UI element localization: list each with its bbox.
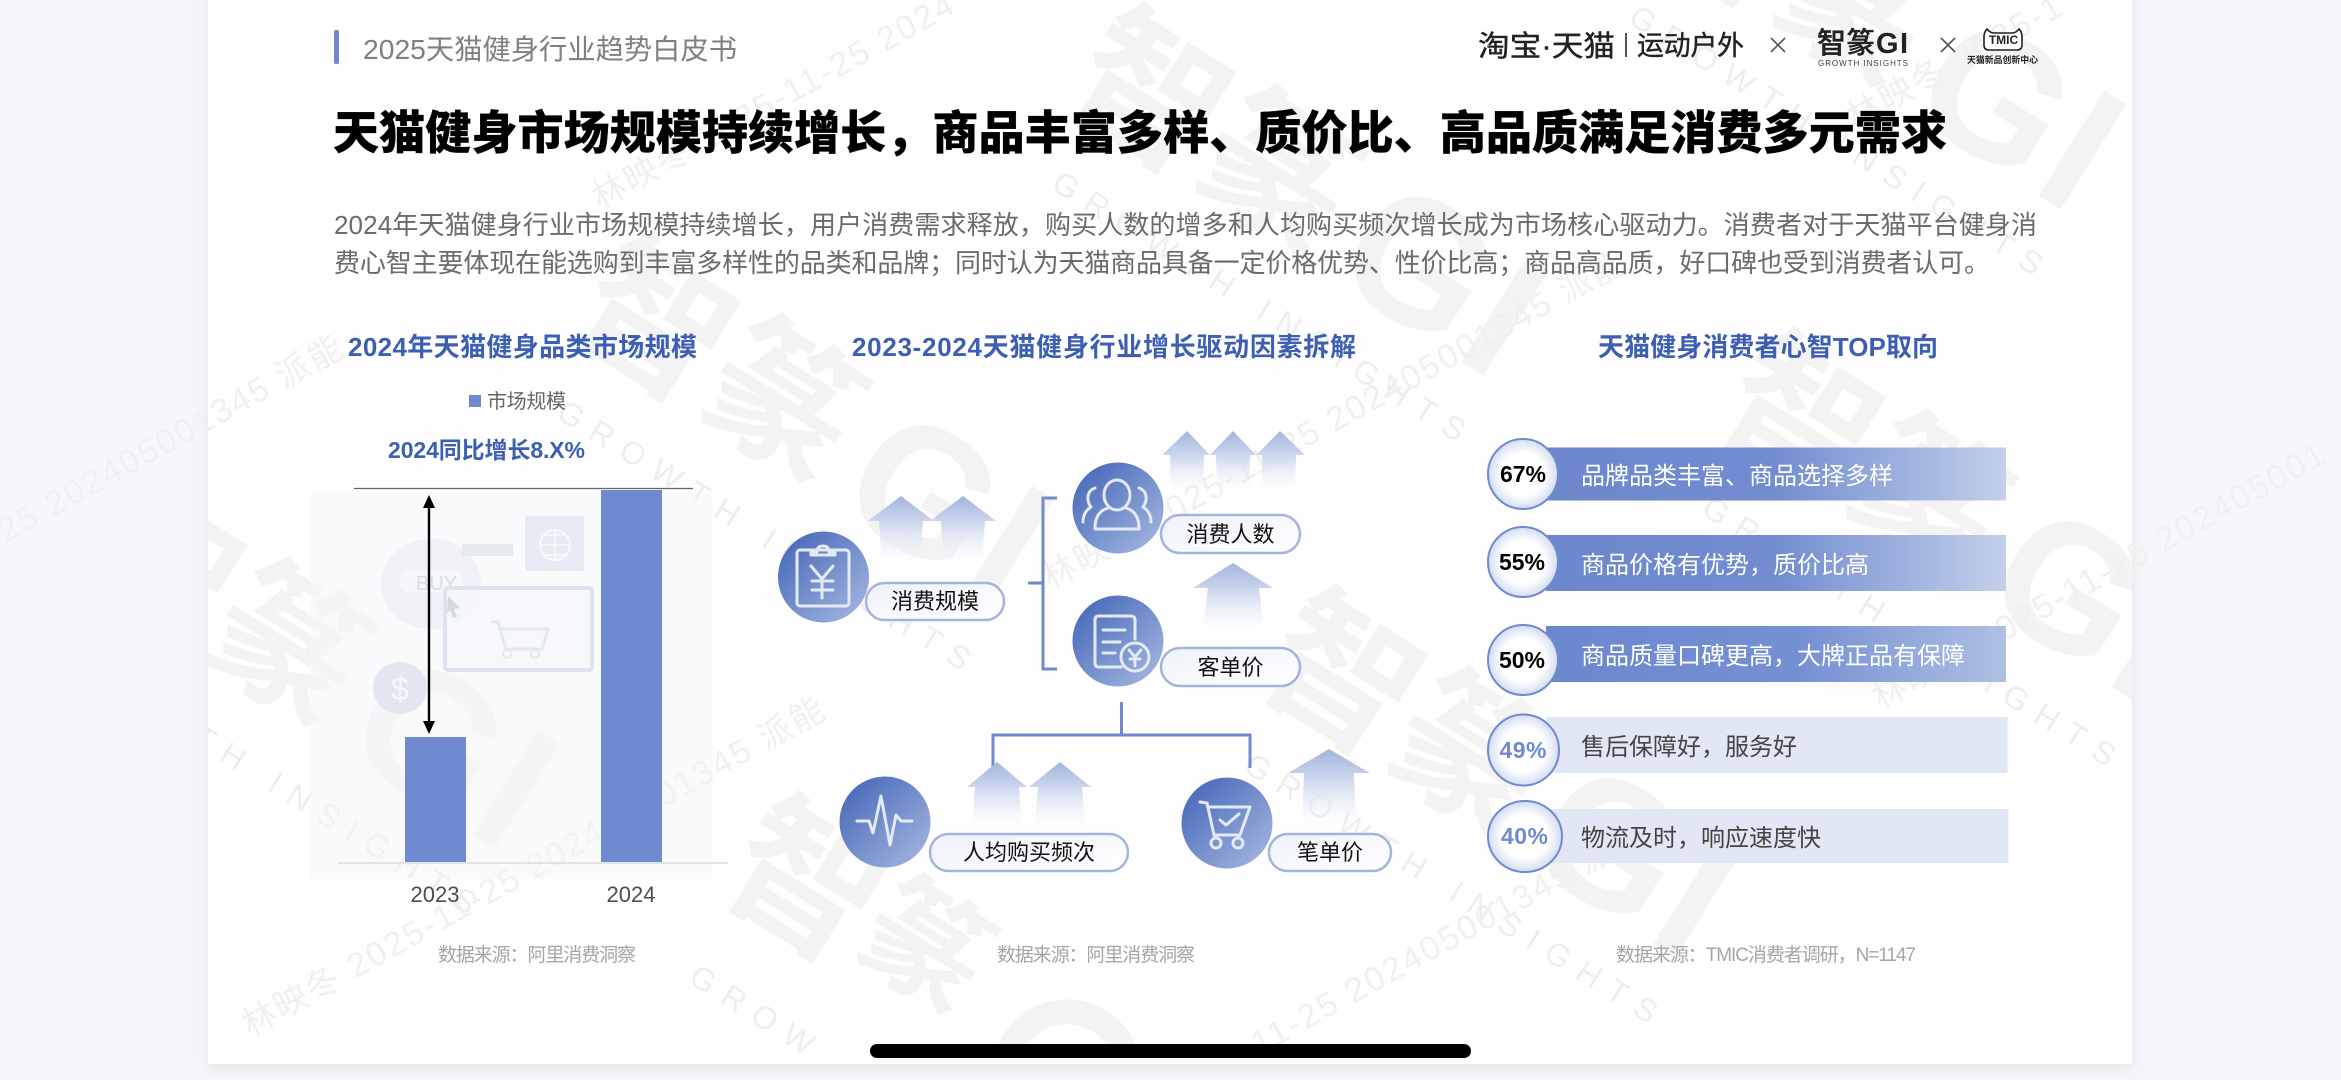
pill label	[866, 583, 1004, 620]
main title: 天猫健身市场规模持续增长，商品丰富多样、质价比、高品质满足消费多元需求	[333, 107, 1947, 159]
pill label	[1161, 648, 1300, 686]
source note: 数据来源：阿里消费洞察	[997, 944, 1195, 966]
growth callout: 2024同比增长8.X%	[388, 437, 585, 463]
bracket connector	[1028, 498, 1057, 669]
watermark: large logos: I	[1431, 218, 1580, 415]
row 2: 55%	[1488, 527, 2006, 597]
header accent bar	[334, 30, 339, 64]
bar 2024	[601, 490, 662, 862]
icon: pulse	[840, 776, 930, 868]
icon: clipboard yuan	[778, 532, 869, 622]
pill label: 消费人数	[1186, 522, 1275, 547]
row 3: 50%: 商品质量口碑更高，大牌正品有保障	[1581, 643, 1965, 670]
watermark: large logos: 智篆	[1233, 564, 1577, 866]
watermark: large logos: G	[812, 370, 1037, 614]
tree connector	[993, 702, 1250, 768]
logo: TMIC	[1967, 29, 2038, 65]
watermark: large logos: GROWTH INSIGHTS	[1696, 489, 2122, 774]
pill label: 客单价	[1197, 655, 1264, 680]
row 5: 40%: 40%	[1501, 823, 1548, 849]
pill label: 人均购买频次	[963, 840, 1095, 865]
panel: growth driver decomposition	[778, 332, 1391, 966]
node: unit price	[1182, 778, 1391, 871]
axis line	[338, 862, 728, 864]
top reference line	[354, 488, 693, 490]
pill label: 消费规模	[891, 589, 979, 614]
logo: taobao tmall sports: 淘宝·天猫	[1478, 30, 1615, 63]
watermark: diagonal user text: 25 202405001345 派能	[0, 329, 349, 550]
logo: growth insights	[1817, 27, 1908, 68]
pill label: 笔单价	[1297, 840, 1363, 865]
intro paragraph: 费心智主要体现在能选购到丰富多样性的品类和品牌；同时认为天猫商品具备一定价格优势、性价比高；商品高品质，好口碑也受到消费者认可。	[334, 248, 1990, 278]
up arrows: consumers	[1162, 431, 1305, 493]
row 1: 67%: 67%	[1500, 461, 1546, 487]
watermark: large logos: GROWTH INSIGHTS	[1046, 164, 1472, 449]
row 2: 55%: 商品价格有优势，质价比高	[1581, 552, 1869, 579]
row 4: 49%	[1488, 714, 2008, 786]
row 1: 67%	[1488, 439, 2006, 509]
node: purchase frequency	[840, 776, 1128, 871]
up arrows: consumption scale	[868, 496, 996, 563]
watermark: large logos: I	[2008, 52, 2157, 249]
partner logos	[1478, 27, 2038, 68]
watermark: large logos: 篆	[834, 855, 1014, 1039]
row 4: 49%: 49%	[1500, 737, 1546, 763]
year labels: 2024	[607, 882, 655, 907]
logo: growth insights: GROWTH INSIGHTS	[1818, 59, 1908, 68]
up arrows: purchase frequency	[967, 762, 1091, 828]
bar 2023	[405, 737, 466, 862]
up arrow: order value	[1193, 563, 1273, 633]
chart heading: 2024年天猫健身品类市场规模	[348, 332, 697, 362]
panel: consumer mindset ranking	[1488, 332, 2008, 966]
intro paragraph: 2024年天猫健身行业市场规模持续增长，用户消费需求释放，购买人数的增多和人均购买频次增长成为市场核心驱动力。消费者对于天猫平台健身消	[334, 210, 2037, 240]
faint background illustration: BUY	[416, 573, 457, 595]
watermark: large logos: 智篆	[546, 211, 890, 513]
row 3: 50%: 50%	[1499, 647, 1545, 673]
home indicator bar	[870, 1044, 1471, 1058]
icon: receipt yuan	[1072, 596, 1164, 686]
panel: market size bar chart	[310, 332, 728, 966]
logo: growth insights: GI	[1876, 28, 1908, 60]
cross mark	[1771, 38, 1785, 52]
pill label	[1161, 515, 1300, 553]
legend: 市场规模	[487, 390, 566, 413]
logo: taobao tmall sports: 运动户外	[1637, 31, 1744, 61]
row 5: 40%: 物流及时，响应速度快	[1581, 825, 1821, 852]
row 2: 55%: 55%	[1499, 549, 1545, 575]
watermark: large logos: GROWTH INSIGHTS	[1238, 746, 1664, 1031]
watermark: large logos: GROWTH INSIGHTS	[551, 393, 977, 678]
source note: 数据来源：阿里消费洞察	[438, 944, 636, 966]
watermark: large logos: GROW	[683, 957, 822, 1063]
up arrow: unit price	[1288, 749, 1370, 827]
watermark: diagonal user text: 林映冬 2025-11-25 202405001345 派能	[235, 691, 831, 1044]
watermark: large logos: G	[1957, 466, 2182, 710]
watermark: large logos: I	[2081, 543, 2230, 740]
logo: TMIC: 天猫新品创新中心	[1967, 54, 2038, 65]
source note: 数据来源：TMIC消费者调研，N=1147	[1616, 944, 1916, 966]
watermark: large logos: GROWTH INSIGHTS	[1623, 0, 2049, 283]
row 3: 50%	[1488, 625, 2006, 695]
year labels: 2023	[411, 882, 459, 907]
node: consumption scale	[778, 532, 1004, 622]
chart heading: 2023-2024天猫健身行业增长驱动因素拆解	[852, 332, 1356, 362]
row 5: 40%	[1488, 801, 2008, 872]
pill label	[930, 834, 1128, 871]
logo: TMIC: TMIC	[1989, 33, 2018, 47]
logo: taobao tmall sports	[1478, 30, 1744, 63]
year labels	[411, 882, 655, 907]
pill label	[1269, 834, 1391, 871]
node: order value	[1072, 596, 1300, 686]
icon: cart	[1182, 778, 1272, 868]
watermark: large logos: 智篆	[1691, 307, 2035, 609]
logo: growth insights: 智篆	[1817, 27, 1875, 60]
double-headed arrow	[423, 495, 435, 734]
watermark: large logos: G	[1499, 723, 1724, 967]
watermark: large logos: G	[318, 614, 543, 858]
node: consumers	[1072, 462, 1300, 554]
faint background illustration	[310, 491, 713, 879]
faint background illustration: $	[391, 671, 409, 707]
row 1: 67%: 品牌品类丰富、商品选择多样	[1581, 463, 1893, 490]
watermark: diagonal user text: 林映冬 2025-11-25 202405001	[1865, 436, 2332, 717]
watermark: large logos: G	[1307, 141, 1532, 385]
watermark: large logos: 智	[696, 772, 913, 994]
icon: people	[1072, 462, 1164, 554]
watermark: diagonal user text: 林映冬 2025-11-25 202405001345 派能	[1035, 244, 1631, 597]
watermark: large logos: I	[442, 691, 591, 888]
watermark: diagonal user text: 11-25 202405001345 派能	[1244, 815, 1651, 1063]
watermark: large logos: I	[936, 447, 1085, 644]
watermark: large logos: 智篆	[52, 455, 396, 757]
watermark: large logos: GROWTH INSIGHTS	[57, 637, 483, 922]
cross mark	[1941, 38, 1955, 52]
intro paragraph	[334, 210, 2037, 278]
watermark: large logos: I	[1623, 800, 1772, 997]
report subtitle: 2025天猫健身行业趋势白皮书	[363, 34, 737, 65]
row 4: 49%: 售后保障好，服务好	[1581, 734, 1797, 761]
chart heading: 天猫健身消费者心智TOP取向	[1598, 332, 1938, 362]
